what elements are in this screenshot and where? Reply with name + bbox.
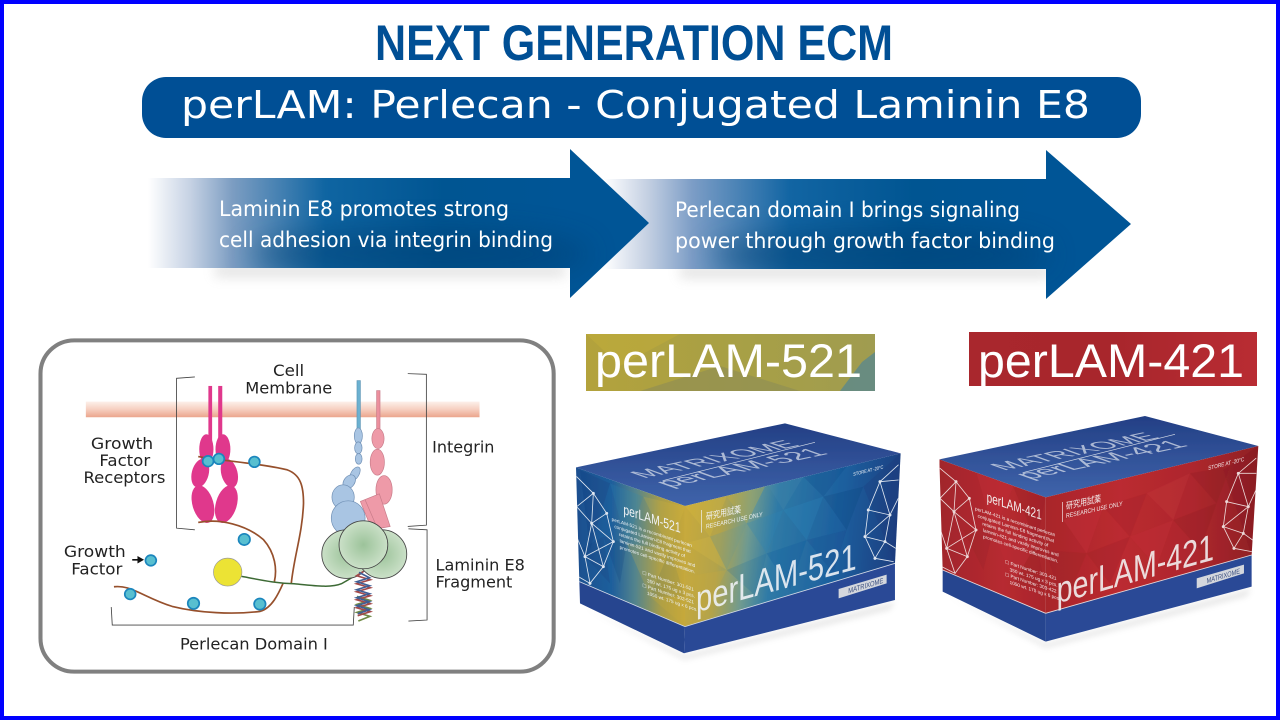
label: perLAM-421: perLAM-421 [978,334,1244,387]
research use badge: 研究用試薬 [706,503,741,523]
coiled coil [357,571,370,621]
side description: ☐ Part Number: 302-521 [642,583,694,606]
research use badge: 研究用試薬 [1066,493,1101,512]
mesh icon right [1223,458,1256,552]
box top face [939,416,1258,497]
diagram labels: Integrin [432,438,494,457]
integrin blue subunit [331,381,365,535]
side description: conjugated Laminin-E8 fragment that [614,524,691,555]
bottom band left [943,570,1046,642]
growth factor receptors [187,386,242,526]
diagram labels: Factor [99,451,150,470]
side wordmark: perLAM-421 [987,490,1042,524]
label: perLAM-521: perLAM-521 [595,334,862,387]
side description: laminin-421 and vastly improves and [983,528,1059,559]
bottom band right [684,563,895,653]
product box: perLAM-421 [939,416,1258,648]
side description: perLAM-421 is a recombinant perlecan [975,506,1056,539]
side description: perLAM-521 is a recombinant perlecan [612,517,692,549]
yellow core [213,558,242,586]
diagram labels: Membrane [245,378,332,397]
logo tag: MATRIXOME [1207,566,1240,585]
arrow: laminin E8 adhesion: Laminin E8 promotes strong [219,197,509,221]
arrow: laminin E8 adhesion [148,149,649,298]
arrow: perlecan domain I signaling: Perlecan domain I brings signaling [675,198,1020,222]
side description: laminin-521 and vastly improves and [620,538,696,569]
growth factor dots [125,454,266,610]
mesh icon left [940,468,976,573]
subtitle banner: perLAM: Perlecan - Conjugated Laminin E8 [181,83,1090,127]
top wordmark: MATRIXOME [624,438,806,480]
side description: 350 wt. 175 ug x 3 pcs. [647,578,695,600]
bottom band right [1046,555,1252,642]
top wordmark: perLAM-421 [1007,438,1195,481]
arrow: perlecan domain I signaling [604,150,1131,299]
box left face [939,459,1046,613]
research use badge [706,498,763,531]
diagram labels [64,361,525,654]
side description: 1050 wt. 175 ug x 6 pcs. [647,591,697,613]
perlecan chain [114,457,304,613]
diagram labels: Fragment [436,573,513,591]
box right face [685,453,901,627]
cell membrane band [86,402,480,417]
side description [975,506,1060,602]
box wordmark on front: perLAM-421 [1057,527,1214,612]
box left face [576,467,685,627]
arrow: laminin E8 adhesion: cell adhesion via integrin binding [219,228,553,252]
diagram labels: Receptors [83,468,165,487]
laminin E8 spheres [322,521,407,578]
side description [612,517,697,613]
side description: retains the full binding activity of [619,532,686,560]
side description: promotes cell-specific differentiation. [620,545,695,575]
storage note: STORE AT -20°C [1208,457,1244,472]
side description: 350 wt. 175 ug x 3 pcs. [1010,567,1058,589]
arrow: perlecan domain I signaling: power through growth factor binding [675,229,1055,253]
diagram labels: Growth [91,434,153,453]
box right face [1046,446,1258,613]
panel: mechanism diagram [40,340,554,672]
mesh icon right [865,465,898,562]
diagram labels: Growth [64,542,126,561]
side description: ☐ Part Number: 301-521 [642,570,694,593]
arrow: growth factor pointer [132,557,142,562]
box top face [576,423,901,506]
mesh icon left [577,477,613,583]
research use badge: RESEARCH USE ONLY [706,511,763,531]
bottom band left [579,582,685,653]
diagram labels: Perlecan Domain I [180,635,328,654]
logo tag: MATRIXOME [848,576,883,595]
logo tag [1197,565,1244,588]
brackets [111,374,427,625]
side description: ☐ Part Number: 303-422 [1005,572,1057,595]
top wordmark: perLAM-521 [647,446,835,489]
integrin pink subunit [360,391,392,530]
side description: conjugated Laminin-E8 fragment that [978,513,1055,545]
box wordmark on front: perLAM-521 [696,537,857,621]
research use badge: RESEARCH USE ONLY [1066,500,1123,520]
title: NEXT GENERATION ECM [375,15,893,71]
diagram labels: Factor [71,560,123,578]
side description: ☐ Part Number: 303-421 [1005,559,1057,582]
side wordmark: perLAM-521 [623,502,681,537]
diagram labels: Cell [273,361,304,380]
logo tag [839,575,887,598]
research use badge [1066,488,1123,520]
side description: retains the full binding activity of [982,521,1049,549]
product box: perLAM-521 [576,423,901,660]
subtitle banner [142,77,1141,138]
storage note: STORE AT -20°C [853,464,884,478]
top wordmark: MATRIXOME [984,431,1166,473]
green linker [242,570,363,586]
side description: 1050 wt. 175 ug x 6 pcs. [1010,580,1060,602]
diagram labels: Laminin E8 [436,556,525,574]
side description: promotes cell-specific differentiation. [983,534,1058,565]
